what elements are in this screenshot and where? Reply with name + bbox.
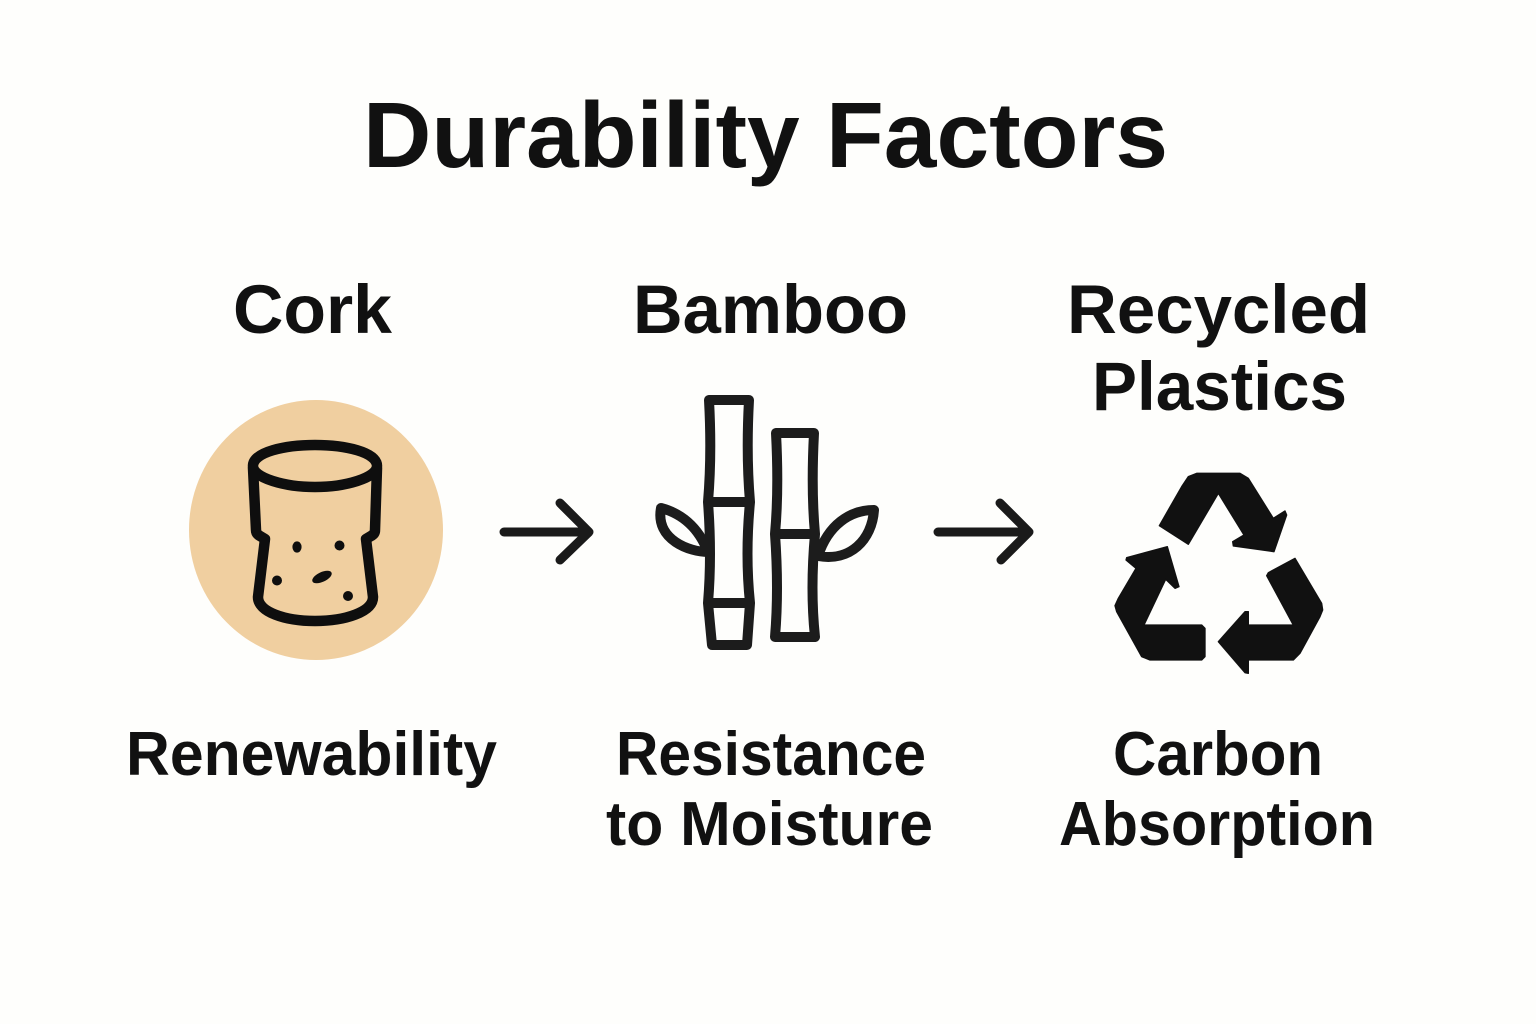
label: carbon absorption: Carbon: [1113, 720, 1323, 789]
panel: cork: [126, 271, 498, 789]
icon: cork: [189, 400, 443, 660]
title: Durability Factors: [363, 83, 1168, 187]
label: resistance to moisture: to Moisture: [606, 790, 933, 859]
arrow: bamboo to recycled plastics: [938, 503, 1029, 560]
icon: bamboo: [660, 400, 874, 645]
heading: recycled plastics: [1067, 271, 1370, 425]
label: renewability: Renewability: [126, 720, 498, 789]
label: carbon absorption: [1059, 720, 1375, 859]
panel: recycled plastics: [1059, 271, 1375, 859]
panel: bamboo: [606, 271, 933, 859]
label: carbon absorption: Absorption: [1059, 790, 1375, 859]
icon: recycling symbol: [1115, 473, 1323, 673]
heading: recycled plastics: Plastics: [1092, 348, 1347, 425]
heading: bamboo: Bamboo: [633, 271, 908, 348]
label: resistance to moisture: Resistance: [616, 720, 926, 789]
heading: cork: Cork: [233, 271, 393, 348]
label: resistance to moisture: [606, 720, 933, 859]
arrow: cork to bamboo: [504, 503, 589, 560]
heading: recycled plastics: Recycled: [1067, 271, 1370, 348]
